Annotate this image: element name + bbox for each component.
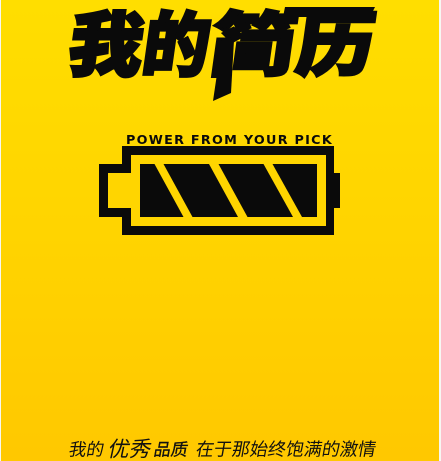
slogan: 优秀	[106, 437, 154, 461]
battery inner frame	[108, 155, 326, 226]
slogan: 品质	[152, 440, 190, 459]
icon: battery	[99, 146, 340, 235]
title: extended stroke tail	[213, 40, 234, 101]
slogan: 我的	[67, 440, 106, 459]
title: 历	[292, 6, 380, 85]
battery charge cells	[140, 164, 317, 217]
title: 我	[64, 7, 149, 86]
tagline: power from your pick: POWER FROM YOUR PICK	[126, 133, 333, 147]
title	[64, 6, 380, 101]
slogan: 在于那始终饱满的激情	[194, 440, 378, 459]
slogan	[67, 437, 378, 461]
title: 的	[138, 7, 215, 85]
title: extended top bar	[283, 7, 375, 17]
battery outer shell	[99, 146, 340, 235]
title: 简	[205, 7, 302, 85]
